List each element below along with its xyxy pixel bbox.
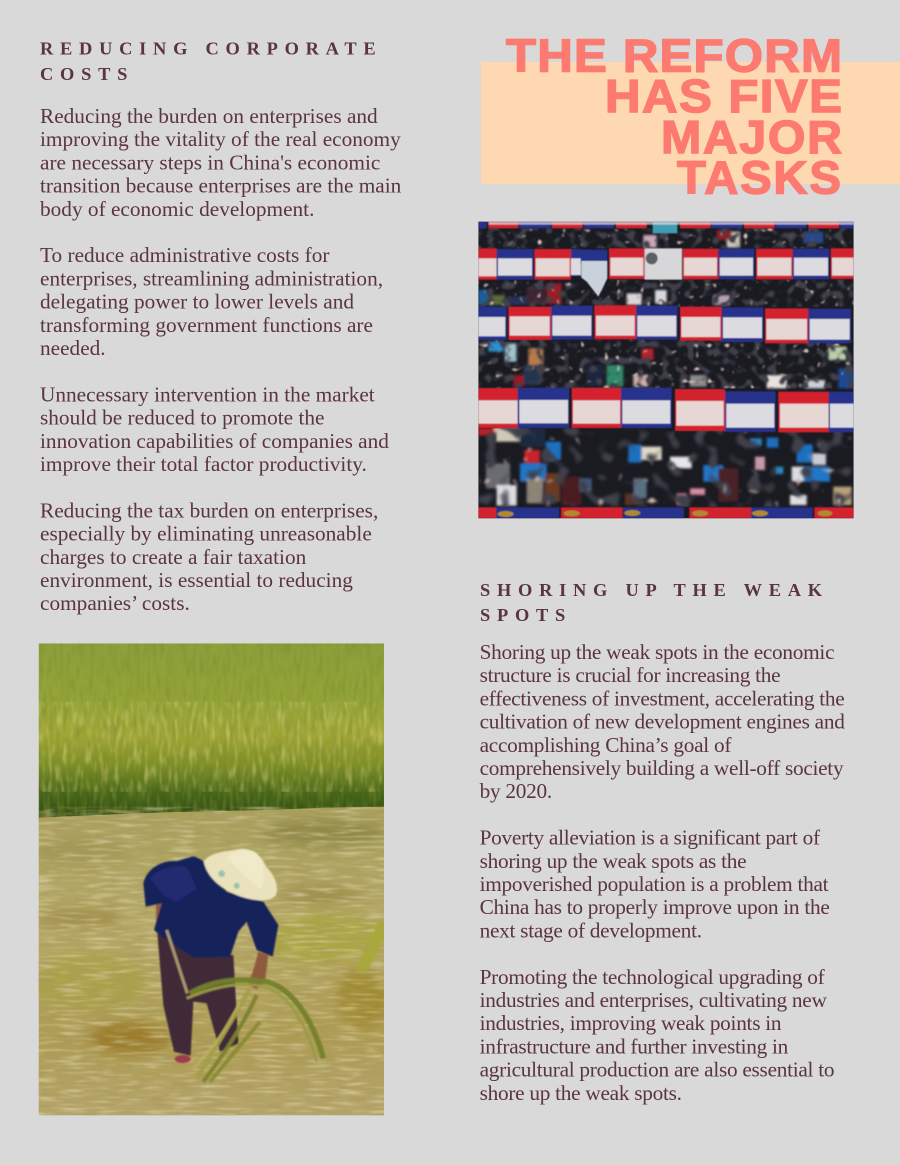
paragraph: economic structure: structure is crucial for increasing the <box>480 663 780 687</box>
heading: reducing corporate costs <box>40 38 382 84</box>
paragraph: economic structure: by 2020. <box>480 779 552 803</box>
job boards, row 2 <box>478 248 854 297</box>
paragraph: technological upgrading: Promoting the technological upgrading of <box>480 965 826 989</box>
rice field <box>39 643 384 820</box>
sickle <box>167 930 187 993</box>
trousers <box>157 933 238 1056</box>
crowd clothing colours <box>478 230 853 506</box>
paragraph: administrative costs: To reduce administrative costs for <box>40 243 329 267</box>
paragraph: poverty alleviation: China has to properly improve upon in the <box>480 895 830 919</box>
title: the reform has five major tasks: THE REFORM <box>506 31 842 82</box>
paragraph: poverty alleviation: impoverished population is a problem that <box>480 872 829 896</box>
heading: reducing corporate costs: COSTS <box>40 64 134 84</box>
hand-held rice bundle <box>187 922 384 1082</box>
paragraph: economic structure: Shoring up the weak spots in the economic <box>480 640 834 664</box>
paragraph: technological upgrading: industries and enterprises, cultivating new <box>480 988 827 1012</box>
text block: reducing corporate costs body <box>40 104 402 615</box>
arm left <box>155 902 162 922</box>
paragraph: burden on enterprises: Reducing the burden on enterprises and <box>40 104 378 128</box>
crowd heads and hair texture <box>478 228 854 507</box>
heading: shoring up the weak spots <box>480 580 829 625</box>
paragraph: burden on enterprises: transition because enterprises are the main <box>40 174 402 198</box>
paragraph: economic structure: cultivation of new development engines and <box>480 710 845 734</box>
paragraph: economic structure <box>480 640 845 803</box>
farmer figure <box>143 849 384 1082</box>
straw hat <box>204 849 277 900</box>
paragraph: market intervention <box>40 382 389 476</box>
foot <box>175 1055 191 1063</box>
paragraph: poverty alleviation: next stage of development. <box>480 918 702 942</box>
paragraph: administrative costs: delegating power to lower levels and <box>40 290 354 314</box>
arm right <box>247 952 268 989</box>
title: the reform has five major tasks: TASKS <box>677 152 841 203</box>
paragraph: burden on enterprises <box>40 104 402 221</box>
paragraph: administrative costs: needed. <box>40 336 106 360</box>
paragraph: poverty alleviation: shoring up the weak spots as the <box>480 849 746 873</box>
photo: crowded job fair <box>478 222 854 518</box>
paragraph: market intervention: should be reduced to promote the <box>40 406 324 430</box>
cut straw ground <box>33 807 390 1115</box>
paragraph: technological upgrading: shore up the weak spots. <box>480 1081 682 1105</box>
shirt <box>143 856 278 958</box>
paragraph: economic structure: effectiveness of investment, accelerating the <box>480 686 844 710</box>
paragraph: tax burden: environment, is essential to reducing <box>40 568 353 592</box>
paragraph: technological upgrading: infrastructure and further investing in <box>480 1034 789 1058</box>
paragraph: tax burden: companies’ costs. <box>40 591 190 615</box>
paragraph: poverty alleviation: Poverty alleviation is a significant part of <box>480 826 821 850</box>
title: the reform has five major tasks <box>506 31 842 203</box>
paragraph: economic structure: comprehensively building a well-off society <box>480 756 844 780</box>
paragraph: tax burden <box>40 498 378 615</box>
paragraph: administrative costs: enterprises, streamlining administration, <box>40 266 383 290</box>
paragraph: burden on enterprises: are necessary steps in China's economic <box>40 150 380 174</box>
paragraph: tax burden: charges to create a fair taxation <box>40 545 307 569</box>
title: the reform has five major tasks: MAJOR <box>661 111 842 163</box>
paragraph: poverty alleviation <box>480 826 830 942</box>
job boards, row 4 <box>478 388 854 432</box>
text block: shoring up the weak spots body <box>480 640 845 1105</box>
paragraph: tax burden: especially by eliminating unreasonable <box>40 522 372 546</box>
title: the reform has five major tasks: HAS FIVE <box>605 71 842 123</box>
paragraph: market intervention: Unnecessary intervention in the market <box>40 382 375 406</box>
photo: farmer harvesting rice <box>33 643 390 1115</box>
heading: shoring up the weak spots: SPOTS <box>480 605 572 625</box>
paragraph: technological upgrading: agricultural production are also essential to <box>480 1058 834 1082</box>
paragraph: technological upgrading: industries, improving weak points in <box>480 1011 782 1035</box>
paragraph: administrative costs: transforming government functions are <box>40 313 373 337</box>
paragraph: market intervention: innovation capabilities of companies and <box>40 429 389 453</box>
title panel <box>481 31 900 203</box>
paragraph: burden on enterprises: improving the vitality of the real economy <box>40 127 401 151</box>
heading: reducing corporate costs: REDUCING CORPORATE <box>40 38 382 58</box>
paragraph: tax burden: Reducing the tax burden on enterprises, <box>40 498 378 522</box>
heading: shoring up the weak spots: SHORING UP THE WEAK <box>480 580 829 600</box>
paragraph: market intervention: improve their total factor productivity. <box>40 452 367 476</box>
job boards, row 3 <box>478 305 851 343</box>
job boards, row 1 <box>478 222 854 233</box>
paragraph: technological upgrading <box>480 965 834 1105</box>
paragraph: economic structure: accomplishing China’s goal of <box>480 733 732 757</box>
title backdrop: peach band <box>481 62 900 184</box>
paragraph: burden on enterprises: body of economic development. <box>40 197 314 221</box>
paragraph: administrative costs <box>40 243 383 360</box>
job boards, row 5 <box>478 507 854 518</box>
